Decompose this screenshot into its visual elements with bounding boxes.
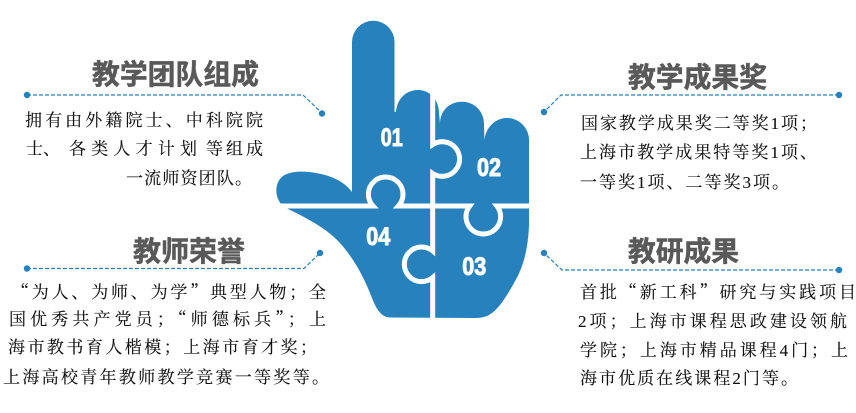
panel: teaching team <box>24 59 325 188</box>
hand silhouette <box>276 21 529 318</box>
body text: 上海高校青年教师教学竞赛一等奖等。 <box>3 367 329 387</box>
body text: 拥有由外籍院士、中科院院 <box>25 111 263 130</box>
body text <box>3 278 329 387</box>
body text: 国家教学成果奖二等奖1项； <box>581 114 817 133</box>
body text: 上海市教学成果特等奖1项、 <box>580 143 817 162</box>
body text: 首批“新工科”研究与实践项目 <box>580 278 856 303</box>
heading: 教师荣誉 <box>133 236 245 267</box>
number 03: 03 <box>462 253 486 281</box>
body text <box>578 278 856 388</box>
body text <box>25 111 263 188</box>
body text: 海市优质在线课程2门等。 <box>580 369 798 388</box>
body text <box>580 114 817 192</box>
number 01: 01 <box>381 124 403 152</box>
connector <box>541 92 842 115</box>
body text: 士、 <box>26 140 60 158</box>
panel: teacher honors <box>3 236 329 387</box>
body text: 一流师资团队。 <box>126 168 252 188</box>
number 04: 04 <box>366 223 390 251</box>
body text: 学院；上海市精品课程4门；上 <box>580 341 848 360</box>
connector <box>541 250 842 273</box>
heading: 教研成果 <box>628 236 739 267</box>
body text: 一等奖1项、二等奖3项。 <box>580 173 789 192</box>
number 02: 02 <box>477 154 501 182</box>
puzzle cut lines <box>268 84 535 322</box>
body text: “为人、为师、为学”典型人物；全 <box>12 278 326 303</box>
connector <box>24 92 325 117</box>
body text: 各类人才计划 <box>69 140 197 158</box>
body text: 海市教书育人楷模；上海市育才奖； <box>8 338 317 357</box>
panel: research results <box>541 236 856 388</box>
body text: 等组成 <box>206 140 263 158</box>
panel: teaching awards <box>541 62 842 192</box>
heading: 教学成果奖 <box>628 62 767 93</box>
body text: 国优秀共产党员；“师德标兵”；上 <box>9 305 326 330</box>
pointing hand puzzle <box>268 21 535 322</box>
heading: 教学团队组成 <box>92 59 259 90</box>
connector <box>24 250 323 272</box>
body text: 2项；上海市课程思政建设领航 <box>578 312 847 331</box>
